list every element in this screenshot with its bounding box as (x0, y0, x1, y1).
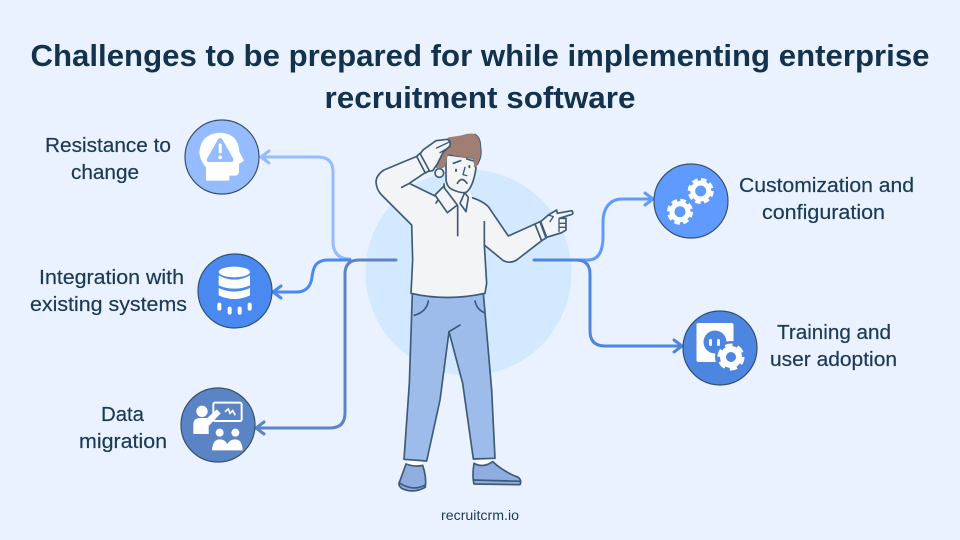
label: customization and configuration: configuration (762, 202, 885, 224)
title (30, 38, 929, 115)
label: resistance to change: change (71, 162, 139, 184)
icon: presentation (181, 388, 255, 462)
shirt (376, 155, 542, 297)
arrow: to customization and configuration (560, 193, 653, 260)
figure: confused man (376, 134, 573, 491)
arrow: to integration with existing systems (273, 260, 350, 298)
label: resistance to change: Resistance to (45, 135, 171, 157)
raised hand and cuff (420, 139, 450, 171)
label: training and user adoption: user adoption (770, 349, 897, 371)
arrow: to training and user adoption (534, 260, 682, 352)
label: customization and configuration: Customization and (739, 175, 914, 197)
label: integration with existing systems (30, 267, 187, 316)
label: integration with existing systems: existing systems (30, 294, 187, 316)
icon: gears (654, 164, 728, 238)
label: training and user adoption: Training and (777, 322, 891, 344)
collar (435, 187, 457, 213)
face (446, 155, 476, 193)
title: recruitment software (324, 80, 636, 115)
label: resistance to change (45, 135, 171, 184)
label: data migration (79, 404, 167, 453)
label: training and user adoption (770, 322, 897, 371)
ear (435, 169, 444, 177)
background circle behind figure (366, 170, 572, 376)
brows eyes nose mouth (453, 159, 473, 163)
neck (435, 183, 473, 218)
hair (436, 134, 481, 169)
label: data migration: Data (101, 404, 145, 426)
label: data migration: migration (79, 431, 167, 453)
legs and shoes (399, 293, 521, 491)
label: integration with existing systems: Integration with (39, 267, 184, 289)
label: customization and configuration (739, 175, 914, 224)
icon: database (198, 254, 272, 328)
footer source: recruitcrm.io (441, 507, 519, 523)
arrow: to resistance to change (261, 151, 350, 259)
pointing hand (541, 210, 573, 237)
icon: socket and gear (683, 311, 757, 385)
title: Challenges to be prepared for while implementing enterprise (30, 38, 929, 73)
arrow: to data migration (256, 260, 396, 434)
icon: head with warning (185, 120, 259, 194)
